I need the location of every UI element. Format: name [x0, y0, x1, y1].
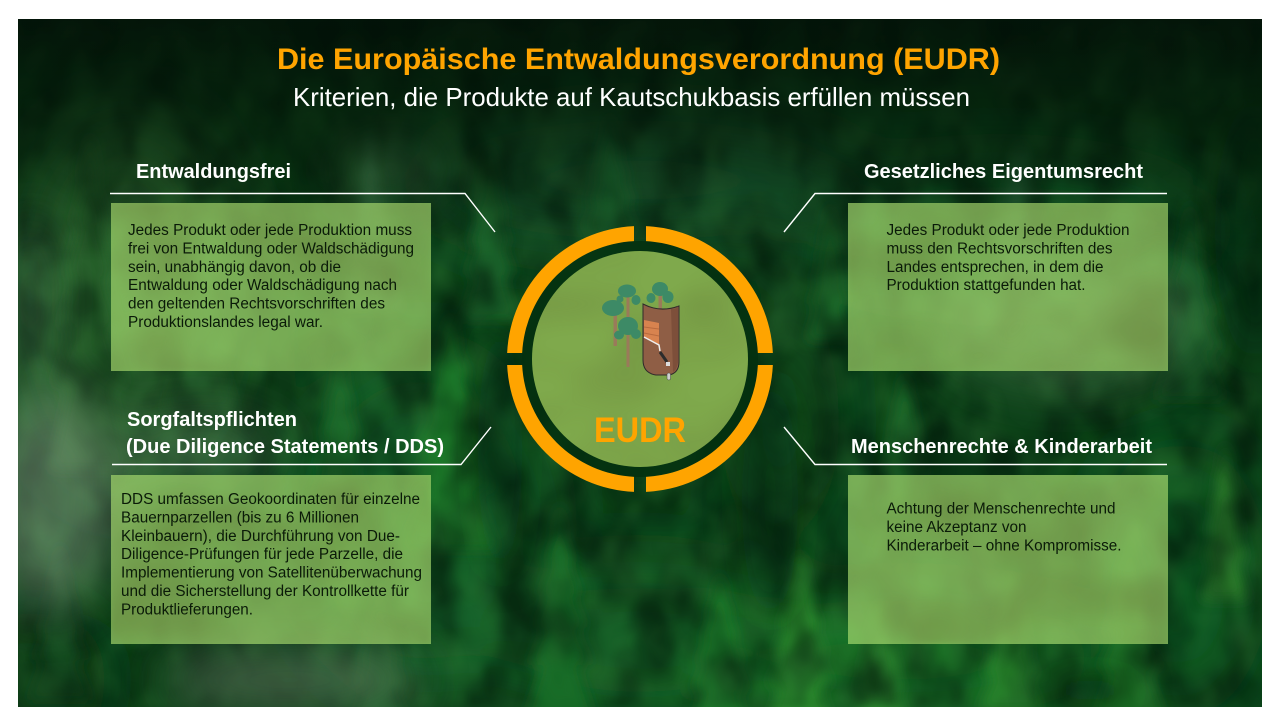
text: Sorgfaltspflichten: Kleinbauern), die Durchführung von Due- [121, 528, 400, 545]
connector line: Menschenrechte und Kinderarbeit [784, 427, 1167, 464]
text: Sorgfaltspflichten: Diligence-Prüfungen für jede Parzelle, die [121, 546, 403, 563]
orange segmented ring [507, 226, 773, 492]
panel: Entwaldungsfrei [110, 161, 495, 371]
text: Gesetzliches Eigentumsrecht [886, 222, 1130, 294]
panel: Menschenrechte und Kinderarbeit [784, 427, 1168, 644]
text: Menschenrechte und Kinderarbeit: Achtung der Menschenrechte und [886, 500, 1116, 518]
text: Entwaldungsfrei: Produktionslandes legal war. [128, 314, 323, 331]
text: Gesetzliches Eigentumsrecht: muss den Rechtsvorschriften des [886, 240, 1113, 257]
dark ring behind circle [522, 241, 758, 477]
central EUDR badge [507, 226, 773, 492]
heading: Menschenrechte und Kinderarbeit: Menschenrechte & Kinderarbeit [851, 436, 1152, 458]
text: Sorgfaltspflichten: DDS umfassen Geokoordinaten für einzelne [121, 491, 420, 508]
text: Sorgfaltspflichten: Bauernparzellen (bis zu 6 Millionen [121, 509, 359, 526]
heading: Sorgfaltspflichten: Sorgfaltspflichten [127, 409, 297, 431]
panel: Gesetzliches Eigentumsrecht [784, 161, 1168, 371]
panel: Sorgfaltspflichten [111, 409, 491, 644]
text: Gesetzliches Eigentumsrecht: Produktion stattgefunden hat. [886, 277, 1086, 294]
subtitle: Kriterien, die Produkte auf Kautschukbasis erfüllen müssen [293, 82, 970, 112]
centre circle [532, 251, 748, 467]
text: Entwaldungsfrei: sein, unabhängig davon, ob die [128, 259, 341, 276]
text: Entwaldungsfrei: den geltenden Rechtsvorschriften des [128, 296, 385, 313]
connector line: Entwaldungsfrei [110, 194, 495, 232]
text: Sorgfaltspflichten: und die Sicherstellung der Kontrollkette für [121, 583, 409, 600]
text: Gesetzliches Eigentumsrecht: Jedes Produkt oder jede Produktion [886, 222, 1130, 239]
icon: trees and tapped rubber trunk [602, 282, 679, 380]
heading: Sorgfaltspflichten: (Due Diligence Statements / DDS) [126, 436, 444, 458]
title: Die Europäische Entwaldungsverordnung (EUDR) [277, 43, 1000, 76]
heading: Entwaldungsfrei: Entwaldungsfrei [136, 161, 291, 183]
connector line: Sorgfaltspflichten [112, 427, 491, 464]
text: Sorgfaltspflichten [121, 491, 422, 618]
text: Menschenrechte und Kinderarbeit: Kinderarbeit – ohne Kompromisse. [886, 537, 1122, 554]
text: Gesetzliches Eigentumsrecht: Landes entsprechen, in dem die [886, 259, 1104, 276]
text: Menschenrechte und Kinderarbeit: keine Akzeptanz von [886, 519, 1026, 536]
EUDR label: EUDR [594, 411, 686, 450]
text: Entwaldungsfrei: Entwaldung oder Waldschädigung nach [128, 277, 397, 294]
heading: Gesetzliches Eigentumsrecht: Gesetzliches Eigentumsrecht [864, 161, 1143, 183]
text: Sorgfaltspflichten: Produktlieferungen. [121, 601, 253, 618]
text: Entwaldungsfrei: frei von Entwaldung oder Waldschädigung [128, 240, 414, 257]
text: Entwaldungsfrei: Jedes Produkt oder jede Produktion muss [128, 222, 412, 239]
heading: Sorgfaltspflichten [126, 409, 444, 458]
text: Menschenrechte und Kinderarbeit [886, 500, 1122, 554]
text: Entwaldungsfrei [128, 222, 414, 331]
text: Sorgfaltspflichten: Implementierung von Satellitenüberwachung [121, 565, 422, 582]
connector line: Gesetzliches Eigentumsrecht [784, 194, 1167, 232]
